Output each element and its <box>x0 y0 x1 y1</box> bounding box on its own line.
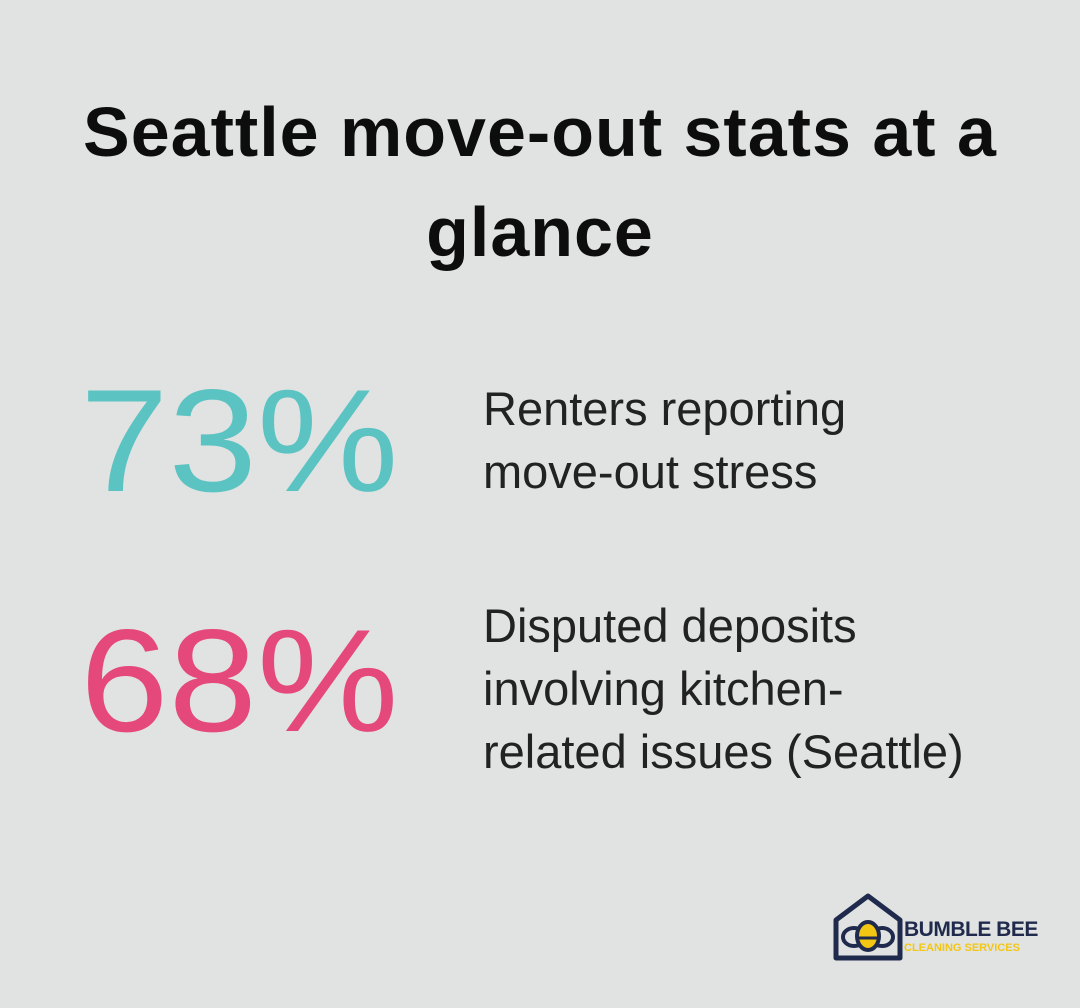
title <box>83 93 997 271</box>
stat 73%: 73% <box>80 359 399 522</box>
logo <box>834 894 1038 960</box>
description 73% <box>483 382 846 498</box>
description 73%: Renters reporting <box>483 382 846 435</box>
description 68%: related issues (Seattle) <box>483 725 964 778</box>
icon: bee house <box>834 894 902 960</box>
stat 68%: 68% <box>80 599 399 762</box>
description 73%: move-out stress <box>483 445 817 498</box>
description 68% <box>483 599 964 778</box>
title: glance <box>426 193 654 271</box>
brand text: BUMBLE BEE <box>904 918 1038 941</box>
description 68%: Disputed deposits <box>483 599 857 652</box>
title: Seattle move-out stats at a <box>83 93 997 171</box>
description 68%: involving kitchen- <box>483 662 844 715</box>
logo: CLEANING SERVICES <box>904 942 1020 954</box>
